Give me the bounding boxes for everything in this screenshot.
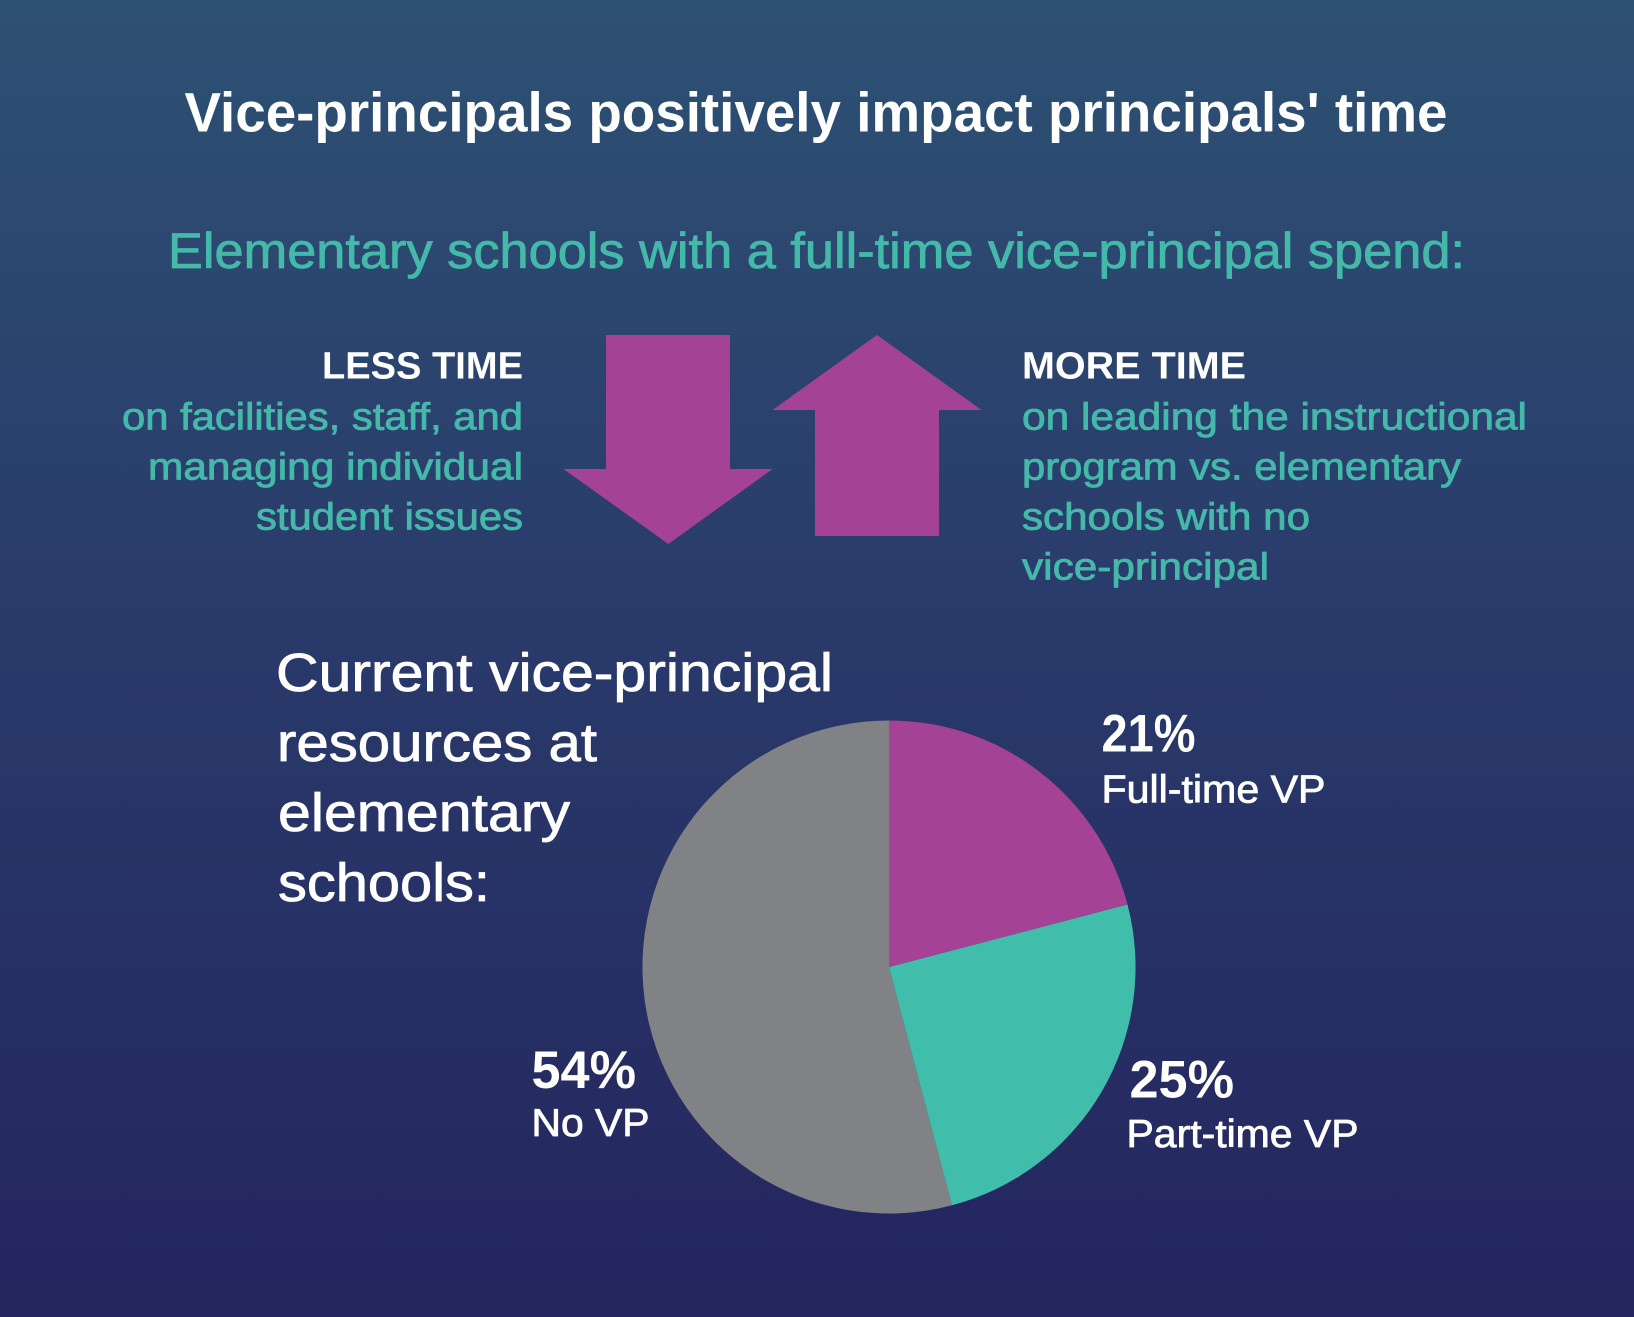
text: more time description: on leading the instructional <box>1022 396 1527 438</box>
subtitle: Elementary schools with a full-time vice-principal spend: <box>168 223 1465 279</box>
title: Vice-principals positively impact principals' time <box>184 80 1448 144</box>
text: more time description: vice-principal <box>1022 546 1269 588</box>
heading: more time: MORE TIME <box>1022 346 1246 388</box>
heading: less time: LESS TIME <box>322 346 523 388</box>
heading: current vice-principal resources: schools: <box>278 853 490 913</box>
label: 21% full-time VP: Full-time VP <box>1102 768 1326 812</box>
panel: more time <box>1022 346 1527 588</box>
text: less time description <box>122 396 523 538</box>
slice: part-time VP 25% <box>889 904 1136 1205</box>
heading: current vice-principal resources: Current vice-principal <box>276 643 833 703</box>
text: more time description: schools with no <box>1022 496 1310 538</box>
heading: current vice-principal resources: elementary <box>278 783 570 843</box>
text: less time description: student issues <box>256 496 523 538</box>
text: less time description: on facilities, staff, and <box>122 396 523 438</box>
arrow: down <box>564 335 772 544</box>
text: more time description <box>1022 396 1527 588</box>
heading: current vice-principal resources: resources at <box>277 713 597 773</box>
pie chart <box>642 720 1136 1214</box>
label: 54% no VP: No VP <box>532 1102 650 1145</box>
text: less time description: managing individual <box>148 446 523 488</box>
label: 21% full-time VP: 21% <box>1102 704 1196 764</box>
label: 25% part-time VP: Part-time VP <box>1126 1113 1358 1156</box>
panel: less time <box>122 346 523 538</box>
label: 54% no VP <box>532 1041 650 1145</box>
slice: no VP 54% <box>642 720 952 1214</box>
label: 21% full-time VP <box>1102 704 1326 812</box>
label: 25% part-time VP <box>1126 1050 1358 1156</box>
label: 54% no VP: 54% <box>532 1041 636 1100</box>
label: 25% part-time VP: 25% <box>1130 1050 1234 1110</box>
arrow: up <box>772 335 982 536</box>
slice: full-time VP 21% <box>889 720 1128 967</box>
text: more time description: program vs. elementary <box>1022 446 1461 488</box>
heading: current vice-principal resources <box>276 643 833 913</box>
